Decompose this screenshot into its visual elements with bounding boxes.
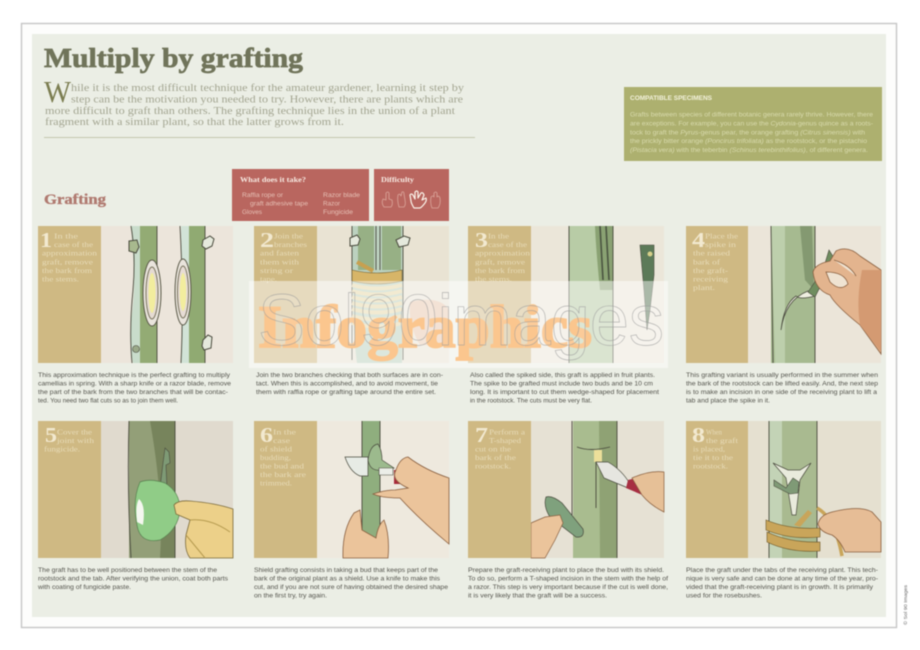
tools list: Razor blade [323,192,360,199]
step 3 title: In the [488,232,510,240]
illustration: hands trimming shield bud with knife [317,421,449,558]
step 7 caption: it is very likely that the graft will be a success. [468,593,607,600]
step number 3: 3 [475,228,488,252]
step 3 title: the stems. [475,274,512,284]
step 2 title: string or [260,266,294,275]
step 7 title: cut on the [475,444,512,454]
step 6 caption: bark of the original plant as a shield. Use a knife to make this [254,576,440,582]
step 8 caption: Place the graft under the tabs of the receiving plant. This tech- [686,567,878,574]
illustration: hand placing spike under bark [748,226,881,363]
step 1 caption [38,372,231,405]
compatible specimens heading: COMPATIBLE SPECIMENS [630,95,712,102]
step 1 title: the stems. [42,274,79,284]
step 5 caption [37,567,228,591]
tools list: Razor [323,200,341,208]
watermark: Infographics: Infographics [258,294,592,360]
watermark [249,281,668,368]
step number 7: 7 [475,423,488,447]
step 4 caption: This grafting variant is usually performed in the summer when [686,372,878,379]
step 4 title: bark of [693,257,721,266]
step 2 title [260,232,307,284]
step 4 tab [686,226,748,363]
step 1 title [42,232,97,284]
step 1 caption: camellias in spring. With a sharp knife or a razor blade, remove [38,380,231,388]
illustration: stem with wedge-cut spike [531,226,664,363]
step 3 title: case of the [488,240,528,249]
illustration: two stems with cuts [101,226,233,363]
step 6 tab [254,421,317,558]
step 7 caption: Prepare the graft-receiving plant to place the bud with its shield. [468,567,664,574]
panel: step 8 [686,421,881,600]
step 2 title: Join the [274,232,304,240]
compatible specimens text: Grafts between species of different botanic genera rarely thrive. However, there [630,112,874,119]
step number 8: 8 [692,423,705,447]
step 4 title: receiving [693,274,728,284]
compatible specimens text: tock to graft the Pyrus -genus pear, the orange grafting (Citrus sinensis) with [630,129,866,136]
step 8 caption: used for the rosebushes. [686,593,762,600]
step 8 title: the graft [706,436,739,445]
illustration: T-shaped incision and shield [531,421,664,558]
step 7 caption [468,567,668,600]
tools list [242,192,360,216]
step 2 caption [256,372,443,396]
step 8 title: rootstock. [693,462,728,470]
step 6 title: the bark are [260,470,307,479]
step 2 title: tape. [260,274,277,284]
step 6 title: In the [273,428,297,436]
step number 1: 1 [40,228,52,252]
step 3 caption [470,372,659,405]
step 6 title: of shield [260,444,292,454]
section heading: Grafting: Grafting [44,192,107,208]
step 4 caption: tab and place the spike in it. [686,398,770,405]
step 1 title: the bark from [42,266,92,275]
panel: step 3 [468,226,664,405]
panel: step 4 [686,226,881,405]
credit: © Sol 90 Images [902,584,908,625]
step 1 caption: the part of the bark from the two branches that will be contac- [38,389,228,396]
panel: step 5 [37,421,233,591]
step 5 caption: The graft has to be well positioned between the stem of the [38,567,217,574]
step 5 tab [38,421,101,558]
step 3 caption: long. It is important to cut them wedge-shaped for placement [470,389,659,396]
step 5 caption: rootstock and the tab. After verifying the union, coat both parts [38,576,228,582]
step 3 title [475,232,530,284]
step 4 caption: is to make an incision in one side of the receiving plant to lift a [686,389,877,396]
compatible specimens text: (Pistacia vera) with the teberbin (Schinus terebinthifolius) , of different genera. [630,147,868,154]
compatible specimens text [630,112,874,154]
step 4 title: plant. [693,283,715,292]
step 2 caption: tact. When this is accomplished, and to avoid movement, tie [256,380,438,388]
intro text block: hile it is the most difficult technique for the amateur gardener, learning it step by [71,83,465,94]
difficulty heading: Difficulty [381,176,414,184]
step 2 tab [254,226,317,363]
step 7 title: bark of the [475,453,517,462]
watermark: Sol90images: Sol90images [258,281,664,361]
step 1 title: approximation [42,249,97,258]
step 6 title: the bud and [260,462,304,470]
step 8 title: is placed, [693,444,725,454]
intro text block [44,74,465,128]
step 8 caption: vided that the graft-receiving plant is in growth. It is primarily [686,584,874,591]
step 4 title: spike in [705,240,736,249]
step 6 title [260,428,307,488]
step 8 title: When [706,428,722,436]
step 3 caption: The spike to be grafted must include two buds and be 10 cm [470,380,653,388]
title: Multiply by grafting [44,43,304,73]
compatible specimens text: are exceptions. For example, you can use the Cydonia -genus quince as a roots- [630,120,873,128]
step 1 tab [38,226,101,363]
step 3 title: the bark from [475,266,525,275]
step 1 title: In the [54,232,79,240]
step 2 title: them with [260,257,299,266]
step 1 caption: ted. You need two flat cuts so as to join them well. [38,398,178,405]
step 6 caption: cut, and if you are not sure of having obtained the desired shape [254,584,448,591]
step 5 title: fungicide. [44,444,80,454]
step 6 caption: Shield grafting consists in taking a bud that keeps part of the [254,567,438,574]
step 5 title: joint with [56,436,94,445]
step 3 caption: Also called the spiked side, this graft is applied in fruit plants. [470,372,655,379]
step 7 title: T-shaped [489,436,521,445]
step 1 caption: This approximation technique is the perfect grafting to multiply [38,372,231,379]
what does it take heading: What does it take? [240,176,306,184]
panel: step 7 [468,421,668,600]
step 6 title: budding, [260,453,291,462]
tools list: graft adhesive tape [250,200,308,208]
drop cap: W [44,74,72,109]
step 5 title: Cover the [57,428,93,436]
illustration: finger coating graft with fungicide [101,421,233,558]
step 7 tab [468,421,531,558]
step 8 tab [686,421,748,558]
step 1 title: graft, remove [42,257,94,266]
step 1 title: case of the [54,240,94,249]
step 4 caption: the bark of the rootstock can be lifted easily. And, the next step [686,380,878,388]
step 2 caption: Join the two branches checking that both surfaces are in con- [256,372,443,379]
panel: what does it take [232,169,369,221]
tools list: Raffia rope or [242,192,284,199]
panel: step 2 [254,226,449,396]
step 3 tab [468,226,531,363]
step 5 caption: with coating of fungicide paste. [37,584,131,591]
illustration: joined stems tied with raffia [317,226,449,363]
step 7 title: rootstock. [475,462,511,470]
step 6 caption [254,567,448,600]
step 3 title: graft, remove [475,257,526,266]
intro text block: step can be the motivation you needed to try. However, there are plants which are [71,94,464,105]
step number 2: 2 [260,228,274,252]
intro text block: more difficult to graft than others. The grafting technique lies in the union of a plant [45,106,455,117]
step number 5: 5 [45,423,57,447]
step 8 caption: nique is very safe and can be done at any time of the year, pro- [686,576,878,582]
icon: difficulty hands, third highlighted [382,191,440,208]
panel: compatible specimens [624,87,882,161]
step 7 title [475,428,526,470]
step 2 title: and fasten [260,249,299,258]
step 6 caption: on the first try, try again. [254,593,327,600]
step 7 title: Perform a [489,428,526,436]
step 6 title: case [273,436,291,445]
step 4 caption [686,372,878,405]
illustration: tying the graft to the rootstock [748,421,881,558]
step 4 title [693,232,739,292]
step number 6: 6 [260,423,273,447]
intro text block: fragment with a similar plant, so that the latter grows from it. [45,117,344,128]
panel: step 6 [254,421,449,600]
step 5 title [44,428,94,454]
step 4 title: the graft- [693,266,729,275]
panel: step 1 [38,226,233,405]
step 2 title: branches [274,240,307,249]
compatible specimens text: the prickly bitter orange (Poncirus trifoliata) as the rootstock, or the pistachio [630,138,868,145]
step 4 title: Place the [705,232,739,240]
step 8 title [693,428,739,470]
tools list: Fungicide [323,209,353,216]
step 6 title: trimmed. [260,478,292,488]
step 7 caption: a razor. This step is very important because if the cut is well done, [468,584,668,591]
step 4 title: the raised [693,249,730,258]
step 3 title: approximation [475,249,530,258]
tools list: Gloves [242,209,262,216]
step 7 caption: To do so, perform a T-shaped incision in the stem with the help of [468,576,668,582]
panel: difficulty [374,169,449,221]
step number 4: 4 [692,228,706,252]
step 8 caption [686,567,878,600]
step 2 caption: them with raffia rope or grafting tape around the entire set. [256,389,436,396]
step 3 caption: in the rootstock. The cuts must be very flat. [470,398,592,405]
step 8 title: tie it to the [693,453,734,462]
